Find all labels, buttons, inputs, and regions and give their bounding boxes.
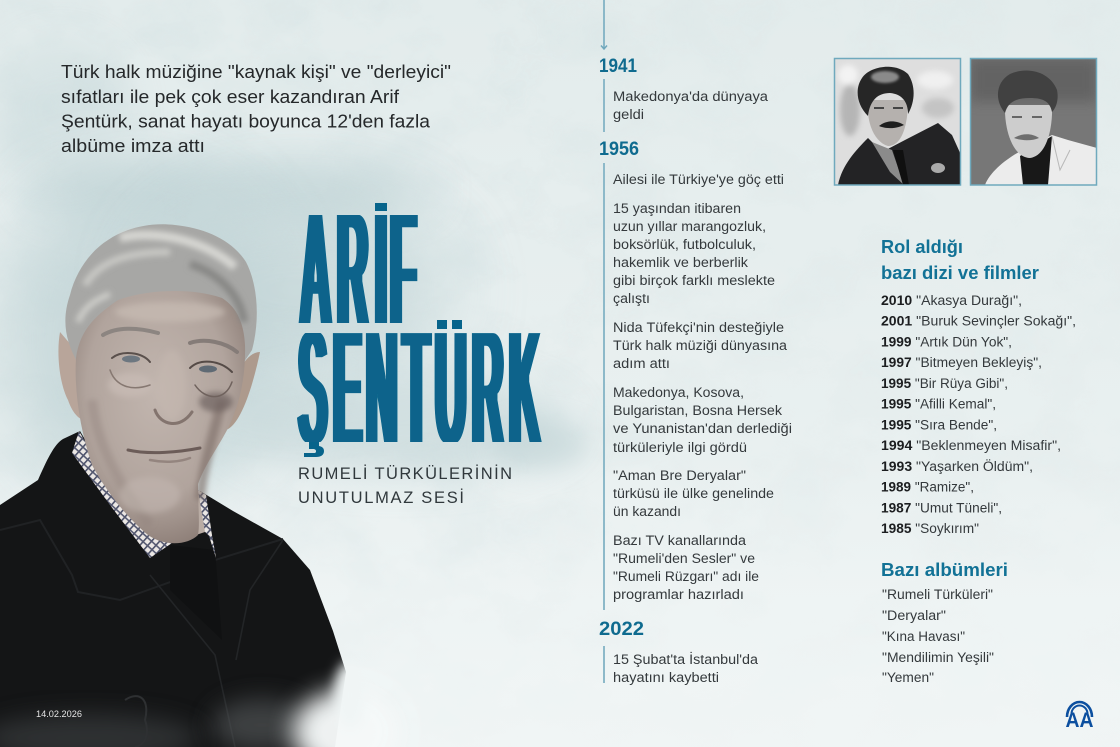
arrow into timeline bbox=[601, 0, 607, 49]
year 2022: hayatını kaybetti bbox=[613, 670, 719, 685]
year 1956: ün kazandı bbox=[613, 504, 681, 519]
films list: 1994 "Beklenmeyen Misafir", bbox=[881, 438, 1061, 453]
intro text block: sıfatları ile pek çok eser kazandıran Arif bbox=[61, 86, 400, 107]
year 1956: Türk halk müziği dünyasına bbox=[613, 338, 788, 353]
year 2022: 2022 bbox=[599, 618, 644, 640]
year 1956: çalıştı bbox=[613, 291, 650, 306]
year 1956: programlar hazırladı bbox=[613, 587, 744, 602]
films list: 1985 "Soykırım" bbox=[881, 521, 979, 536]
albums list: "Kına Havası" bbox=[882, 629, 965, 644]
date: 14.02.2026 bbox=[36, 709, 82, 720]
year 2022 bbox=[599, 618, 759, 685]
year 1941: Makedonya'da dünyaya bbox=[613, 89, 769, 104]
year 1956: türküsü ile ülke genelinde bbox=[613, 486, 774, 501]
films list: 2001 "Buruk Sevinçler Sokağı", bbox=[881, 314, 1076, 329]
year 1956: "Rumeli'den Sesler" ve bbox=[613, 551, 755, 566]
films list: 1999 "Artık Dün Yok", bbox=[881, 334, 1012, 350]
intro text block: Türk halk müziğine "kaynak kişi" ve "derleyici" bbox=[61, 61, 451, 82]
albums list: "Rumeli Türküleri" bbox=[882, 587, 993, 602]
intro text block: Şentürk, sanat hayatı boyunca 12'den fazla bbox=[61, 110, 431, 132]
albums heading: Bazı albümleri bbox=[881, 559, 1008, 580]
collar: checked shirt bbox=[72, 431, 172, 558]
albums list: "Yemen" bbox=[882, 670, 934, 685]
subtitle bbox=[298, 464, 512, 507]
year 1956: Makedonya, Kosova, bbox=[613, 385, 744, 400]
photo: younger portrait with moustache and dark suit bbox=[834, 58, 961, 185]
albums list: "Mendilimin Yeşili" bbox=[882, 650, 994, 665]
timeline bbox=[599, 0, 792, 685]
films heading bbox=[881, 236, 1039, 283]
year 1956: "Rumeli Rüzgarı" adı ile bbox=[613, 569, 759, 584]
albums list bbox=[881, 559, 1008, 685]
year 1956: türküleriyle ilgi gördü bbox=[613, 440, 747, 455]
year 1941: geldi bbox=[613, 107, 644, 122]
films list: 2010 "Akasya Durağı", bbox=[881, 293, 1022, 308]
year 1956: ve Yunanistan'dan derlediği bbox=[613, 421, 792, 436]
photo: portrait with curly hair and white jacket bbox=[970, 58, 1097, 185]
films heading: bazı dizi ve filmler bbox=[881, 262, 1039, 283]
year 1956: "Aman Bre Deryalar" bbox=[613, 468, 746, 483]
year 1941 bbox=[599, 55, 769, 132]
ears bbox=[58, 332, 88, 420]
films heading: Rol aldığı bbox=[881, 236, 963, 257]
films list: 1997 "Bitmeyen Bekleyiş", bbox=[881, 355, 1042, 370]
year 1956: boksörlük, futbolculuk, bbox=[613, 237, 756, 252]
year 1956 bbox=[599, 138, 792, 610]
hair bbox=[65, 224, 257, 365]
subtitle: RUMELİ TÜRKÜLERİNİN bbox=[298, 464, 512, 483]
year 1956: Bulgaristan, Bosna Hersek bbox=[613, 403, 782, 418]
year 1956: 1956 bbox=[599, 138, 639, 160]
films list bbox=[881, 236, 1076, 536]
subtitle: UNUTULMAZ SESİ bbox=[298, 488, 464, 507]
year 1941: 1941 bbox=[599, 55, 637, 77]
films list: 1993 "Yaşarken Öldüm", bbox=[881, 459, 1033, 474]
jacket bbox=[0, 431, 346, 747]
albums list: "Deryalar" bbox=[882, 608, 946, 623]
title: Arif Şentürk: ARİF bbox=[300, 175, 416, 362]
photo frame left bbox=[834, 58, 960, 185]
intro text block bbox=[61, 61, 451, 156]
films list: 1995 "Afilli Kemal", bbox=[881, 397, 996, 412]
logo: AA: AA bbox=[1066, 709, 1094, 732]
year 1956: gibi birçok farklı meslekte bbox=[613, 273, 775, 288]
photo frame right bbox=[970, 58, 1096, 185]
year 1956: hakemlik ve berberlik bbox=[613, 255, 748, 270]
year 2022: 15 Şubat'ta İstanbul'da bbox=[613, 652, 759, 667]
year 1956: Bazı TV kanallarında bbox=[613, 533, 747, 548]
films list: 1989 "Ramize", bbox=[881, 480, 974, 495]
year 1956: 15 yaşından itibaren bbox=[613, 201, 741, 216]
title: Arif Şentürk bbox=[297, 203, 542, 457]
face bbox=[76, 291, 245, 543]
portrait: elderly Arif Şentürk bbox=[0, 224, 397, 747]
year 1956: adım attı bbox=[613, 356, 670, 371]
eyes and brows bbox=[103, 329, 237, 462]
title: Arif Şentürk: ŞENTÜRK bbox=[298, 294, 540, 481]
films list: 1995 "Bir Rüya Gibi", bbox=[881, 376, 1008, 391]
year 1956: uzun yıllar marangozluk, bbox=[613, 219, 766, 234]
year 1956: Nida Tüfekçi'nin desteğiyle bbox=[613, 320, 784, 335]
intro text block: albüme imza attı bbox=[61, 135, 205, 156]
fog over jacket bbox=[0, 661, 397, 747]
background: watercolor paper bbox=[0, 0, 1102, 498]
films list: 1987 "Umut Tüneli", bbox=[881, 500, 1002, 515]
year 1956: Ailesi ile Türkiye'ye göç etti bbox=[613, 172, 784, 187]
films list: 1995 "Sıra Bende", bbox=[881, 417, 997, 432]
